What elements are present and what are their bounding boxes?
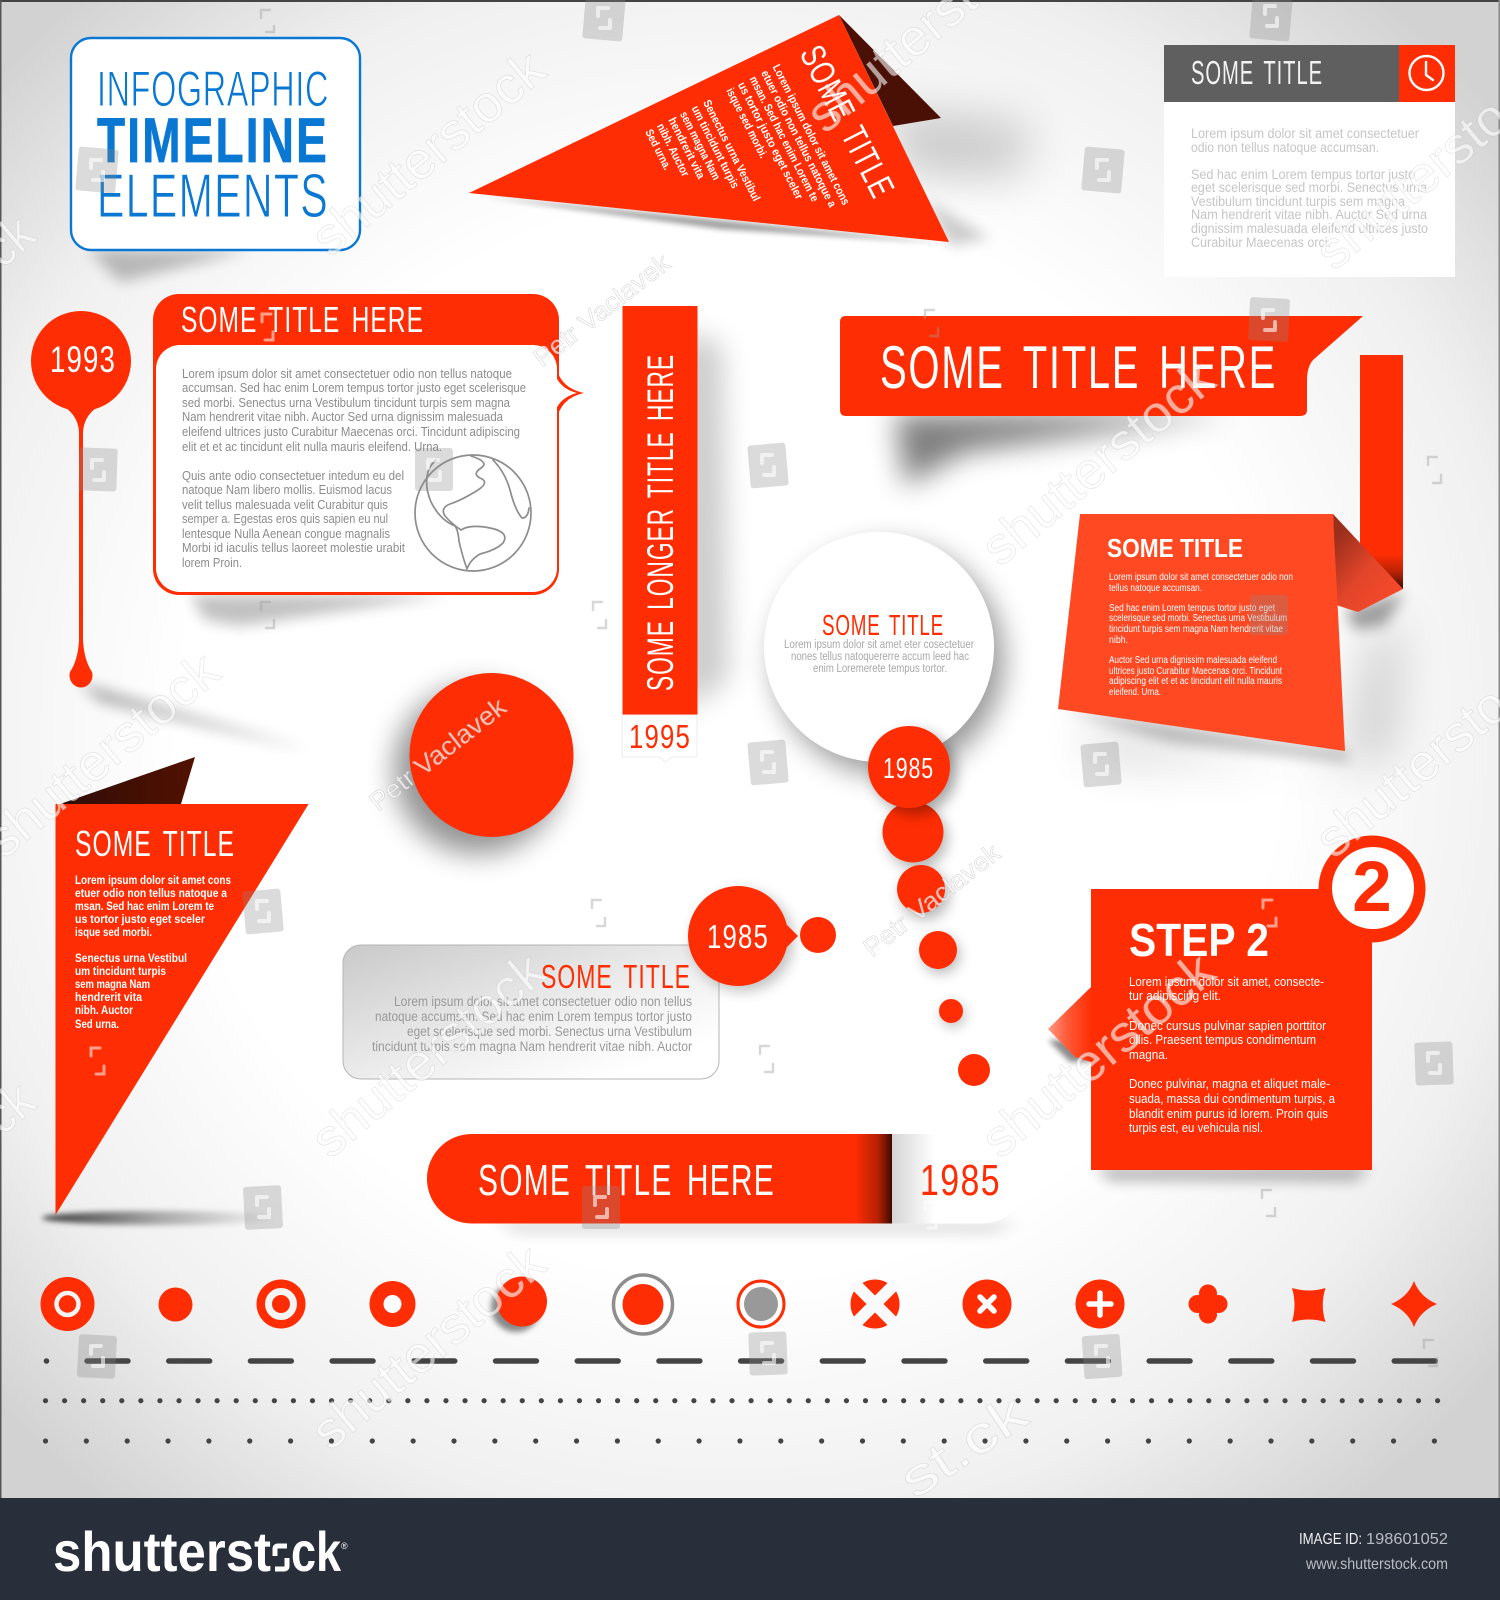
panel: folded triangle top: Sed urna. [642,128,673,172]
year tag 1995: 1995 [629,718,691,755]
image id: 198601052 [1366,1531,1448,1548]
panel: origami card with strip: adipiscing elit et et ac tincidunt elit nulla mauris [1109,676,1282,687]
panel: text card with globe: velit tellus malesuada velit Curabitur quis [182,498,388,512]
image id: www.shutterstock.com [1305,1556,1448,1573]
footer logo: ® [341,1541,348,1551]
panel: step 2 card: turpis est, eu vehicula nisl. [1129,1120,1263,1135]
panel: folded triangle top: isque sed morbi. [723,86,769,160]
panel: ribbon title [840,316,1363,486]
icon: donut [370,1281,416,1327]
panel: grey header card top right: Sed hac enim Lorem tempus tortor justo [1191,167,1415,182]
panel: step 2 card: Donec pulvinar, magna et aliquet male- [1129,1076,1330,1091]
panel: text card with globe: Nam hendrerit vitae nibh. Auctor Sed urna dignissim malesuada [182,410,503,424]
panel: grey header card top right: Nam hendrerit vitae nibh. Auctor Sed urna [1191,207,1427,222]
panel: step 2 card: magna. [1129,1047,1168,1062]
panel: text card with globe [153,294,584,626]
panel: left folded triangle: SOME TITLE [75,823,235,864]
panel: step 2 card [1048,836,1426,1180]
title panel: INFOGRAPHIC [97,61,329,117]
panel: white circle with title: Lorem ipsum dolor sit amet eter cosectetuer [784,639,974,651]
watermarks: Petr Vaclavek [527,247,677,373]
panel: ribbon title: SOME TITLE HERE [880,334,1277,401]
panel: text card with globe: SOME TITLE HERE [181,299,424,340]
panel: text card with globe: lorem Proin. [182,556,242,570]
panel: left folded triangle: nibh. Auctor [75,1005,133,1017]
panel: folded triangle top: us tortor justo eget sceler [735,80,805,202]
panel: origami card with strip: Auctor Sed urna dignissim malesuada eleifend [1109,655,1277,666]
icon: plus [1076,1280,1124,1328]
watermarks: Petr Vaclavek [363,691,513,817]
panel: vertical title bar: SOME LONGER TITLE HERE [640,354,681,691]
panel: step 2 card: suada, massa dui condimentum turpis, a [1129,1091,1336,1106]
panel: folded triangle top: Senectus urna Vestibul [700,98,762,203]
panel: left folded triangle: Sed urna. [75,1019,119,1031]
panel: step 2 card: STEP 2 [1129,914,1269,966]
panel: grey header card top right: eget scelerisque sed morbi. Senectus urna [1191,180,1427,195]
panel: grey gradient card: eget scelerisque sed morbi. Senectus urna Vestibulum [407,1024,692,1039]
panel: step 2 card: blandit enim purus id lorem. Proin quis [1129,1106,1328,1121]
panel: text card with globe: eleifend ultrices justo Curabitur Maecenas orci. Tincidunt adipiscing [182,425,520,439]
panel: origami card with strip: eleifend. Urna. [1109,687,1161,698]
title panel: TIMELINE [97,106,329,176]
panel: text card with globe: accumsan. Sed hac enim Lorem tempus tortor justo eget scelerisque [182,381,526,395]
panel: origami card with strip: Sed hac enim Lorem tempus tortor justo eget [1109,603,1275,614]
year tag 1995 [622,715,697,762]
watermarks: shutterstock [970,941,1227,1169]
panel: folded triangle top: sem magna Nam [677,110,722,182]
icon: concave square [1292,1288,1326,1322]
panel: text card with globe: natoque Nam libero mollis. Euismod lacus [182,483,392,497]
panel: origami card with strip: scelerisque sed morbi. Senectus urna Vestibulum [1109,613,1287,624]
icon: red ring grey dot [738,1281,784,1327]
icon: plain dot [158,1288,192,1322]
watermarks: shutterstock [300,1233,557,1461]
panel: folded triangle top: nibh. Auctor [654,122,691,179]
panel: grey header card top right: Lorem ipsum dolor sit amet consectetuer [1191,126,1419,141]
panel: left folded triangle: etuer odio non tellus natoque a [75,888,228,900]
panel: text card with globe: elit et et ac tincidunt elit nulla mauris eleifend. Urna. [182,440,442,454]
footer logo: shutterst [53,1520,271,1583]
panel: left folded triangle: hendrerit vita [75,992,143,1004]
panel: folded triangle top: etuer odio non tellus natoque a [758,69,838,210]
panel: origami card with strip: nibh. [1109,635,1128,646]
panel: pill title with year: SOME TITLE HERE [478,1156,775,1205]
image id [1299,1531,1448,1573]
panel: grey gradient card: natoque accumsan. Sed hac enim Lorem tempus tortor justo [375,1009,692,1024]
panel: grey header card top right: odio non tellus natoque accumsan. [1191,140,1379,155]
big red circle [394,673,574,854]
panel: vertical title bar [622,306,728,762]
title panel: ELEMENTS [97,162,329,231]
panel: white circle with title: nones tellus natoquererre accum leed hac [791,651,969,663]
panel: white circle with title: enim Loremerete tempus tortor. [813,663,947,675]
dashed and dotted separators [44,1358,1439,1441]
icon: globe [415,455,531,571]
panel: step 2 card: Lorem ipsum dolor sit amet, consecte- [1129,974,1324,989]
year marker 1985 with dot [688,886,836,991]
panel: left folded triangle: Senectus urna Vestibul [75,953,187,965]
panel: left folded triangle: msan. Sed hac enim Lorem te [75,901,214,913]
panel: grey gradient card: tincidunt turpis sem magna Nam hendrerit vitae nibh. Auctor [372,1039,692,1054]
icon: diamond [1391,1281,1437,1327]
panel: origami card with strip: Lorem ipsum dolor sit amet consectetuer odio non [1109,572,1293,583]
icon: ringed dot large [40,1277,94,1331]
panel: text card with globe: Lorem ipsum dolor sit amet consectetuer odio non tellus natoque [182,367,512,381]
icon: close [962,1280,1012,1328]
panel: folded triangle top: msan. Sed hac enim Lorem te [747,75,820,204]
icon: clock [1410,56,1444,90]
watermarks: shutterstock [300,39,557,267]
panel: grey header card top right: dignissim malesuada eleifend ultrices justo [1191,221,1428,236]
panel: folded triangle top: Lorem ipsum dolor sit amet cons [770,63,851,207]
panel: text card with globe: lentesque Nulla Aenean congue magnalis [182,527,390,541]
watermarks: st.ck [889,1383,1039,1510]
panel: white circle with title [764,532,1004,775]
panel: left folded triangle [42,757,309,1225]
icon: shadowed dot [491,1276,547,1332]
panel: origami card with strip: tincidunt turpis sem magna Nam hendrerit vitae [1109,624,1283,635]
panel: folded triangle top [469,15,1030,281]
panel: left folded triangle: um tincidunt turpis [75,966,166,978]
panel: grey header card top right [1164,45,1455,277]
panel: text card with globe: Morbi id iaculis tellus laoreet molestie urabit [182,541,405,555]
panel: text card with globe: sed morbi. Senectus urna Vestibulum tincidunt turpis sem magna [182,396,510,410]
panel: grey header card top right: SOME TITLE [1191,54,1323,91]
timeline pin 1993 [31,311,310,750]
watermarks: shutterstock [300,941,557,1169]
footer bar [0,1498,1500,1600]
icon: cross sectors [850,1280,900,1328]
panel: grey gradient card: Lorem ipsum dolor sit amet consectetuer odio non tellus [394,994,692,1009]
watermarks: Petr Vaclavek [857,837,1007,963]
panel: folded triangle top: um tincidunt turpis [689,104,741,191]
watermarks: shutterstock [970,349,1227,577]
title panel [71,38,360,282]
icon: target [256,1280,306,1328]
panel: origami card with strip: tellus natoque accumsan. [1109,583,1202,594]
panel: text card with globe: semper a. Egestas eros quis sapien eu nul [182,512,388,526]
year marker 1985 with dot: 1985 [707,918,769,955]
number badge: 2 [1352,848,1392,927]
panel: origami card with strip: SOME TITLE [1107,533,1243,563]
panel: grey gradient card: SOME TITLE [541,958,691,995]
panel: step 2 card: tur adipiscing elit. [1129,988,1221,1003]
panel: text card with globe: Quis ante odio consectetuer intedum eu del [182,469,404,483]
panel: grey header card top right: Curabitur Maecenas orci. [1191,235,1331,250]
panel: origami card with strip: ultrices justo Curabitur Maecenas orci. Tincidunt [1109,666,1282,677]
panel: left folded triangle: Lorem ipsum dolor sit amet cons [75,875,231,887]
image id: IMAGE ID: [1299,1531,1362,1548]
panel: grey gradient card [343,945,719,1079]
panel: origami card with strip [1058,355,1405,770]
panel: grey header card top right: Vestibulum tincidunt turpis sem magna [1191,194,1405,209]
dot chain 1985: 1985 [883,753,934,785]
panel: white circle with title: SOME TITLE [822,610,944,642]
panel: step 2 card: ollis. Praesent tempus condimentum [1129,1032,1316,1047]
panel: pill title with year: 1985 [920,1156,1001,1205]
panel: left folded triangle: us tortor justo eget sceler [75,914,205,926]
footer logo: ck [291,1520,342,1583]
panel: folded triangle top: hendrerit vita [665,116,707,181]
panel: folded triangle top: SOME TITLE [792,39,902,205]
panel: left folded triangle: isque sed morbi. [75,927,152,939]
panel: left folded triangle: sem magna Nam [75,979,150,991]
panel: pill title with year [427,1134,1027,1233]
icon: club [1188,1284,1228,1324]
panel: step 2 card: Donec cursus pulvinar sapien porttitor [1129,1018,1327,1033]
icon: grey ring dot [614,1275,672,1334]
dot chain 1985 [868,726,990,1086]
timeline pin 1993: 1993 [50,339,116,380]
icon row: timeline markers [40,1275,1437,1334]
number badge [1318,836,1426,942]
